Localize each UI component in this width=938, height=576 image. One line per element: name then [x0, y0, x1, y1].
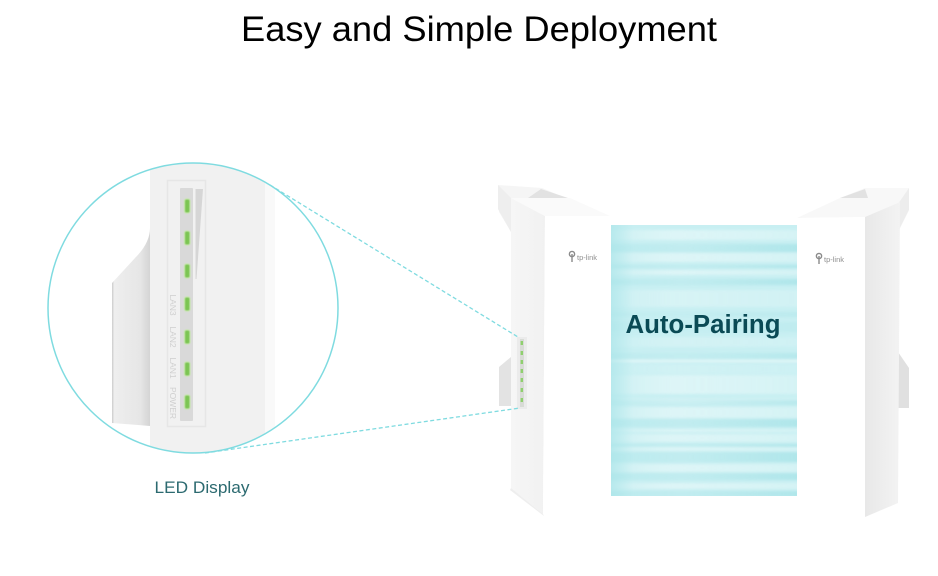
dashed leader lines: [205, 185, 520, 453]
LED panel: LAN1: [168, 357, 178, 379]
left LED strip: [517, 337, 527, 409]
LED display caption: LED Display: [154, 479, 250, 497]
right access point: [797, 188, 909, 517]
magnified device body: [150, 160, 265, 456]
auto-pairing signal panel: [611, 225, 797, 496]
left logo: tp-link: [577, 253, 597, 262]
LED panel: POWER: [168, 387, 178, 419]
magnified mounting bracket: [112, 228, 150, 426]
magnified LED callout: [48, 160, 520, 456]
right logo: tp-link: [824, 255, 844, 264]
LED panel: [168, 180, 206, 426]
LED panel: LAN2: [168, 326, 178, 348]
auto-pairing label: Auto-Pairing: [626, 311, 780, 339]
left logo: [569, 251, 597, 262]
right logo: [816, 253, 844, 264]
left access point: [498, 185, 610, 516]
LED panel: LAN3: [168, 294, 178, 316]
title: Easy and Simple Deployment: [241, 10, 717, 49]
callout circle outline: [48, 163, 338, 453]
